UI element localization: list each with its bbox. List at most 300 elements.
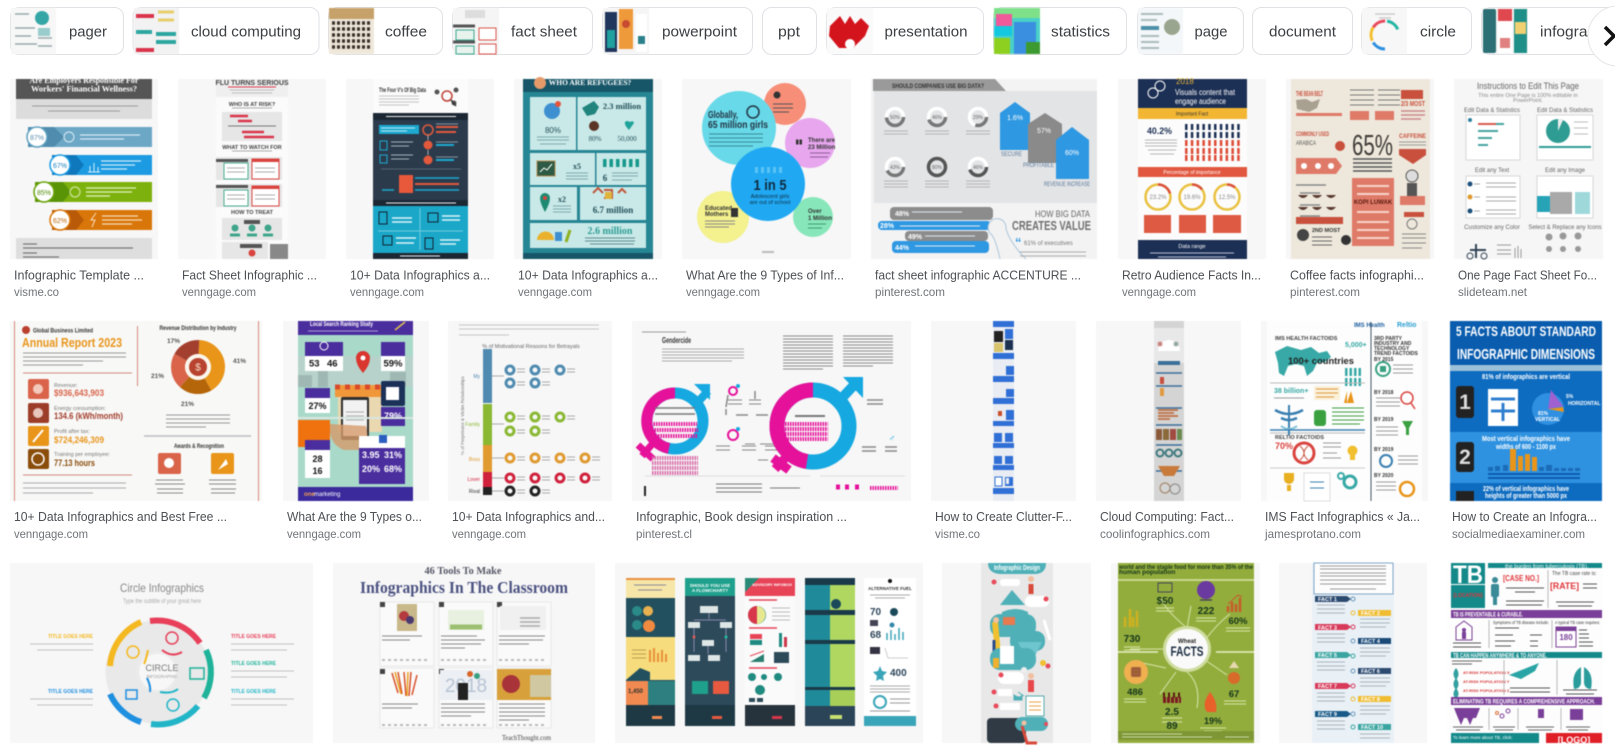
thumbnail: TB fact sheet: TB IS PREVENTABLE & CURABLE. (1453, 612, 1523, 618)
title: What Are the 9 Types of Inf... (686, 268, 844, 282)
thumbnail: 5 facts about standard infographic dimensions: 81% of infographics are vertical (1482, 374, 1570, 381)
thumbnail: local search ranking study: 46 (327, 358, 338, 370)
thumbnail: 1 in 5 venn bubbles (696, 82, 836, 254)
result: IMS Fact Infographics (jamesprotano.com) (1261, 321, 1428, 541)
thumbnail: flu fact sheet: FLU TURNS SERIOUS (215, 80, 289, 87)
chip: presentation (826, 8, 984, 54)
thumbnail: motivational reasons stacked bar: Family (465, 422, 480, 428)
thumbnail: annual report 2023: $936,643,903 (54, 388, 104, 399)
source: coolinfographics.com (1100, 527, 1210, 541)
thumbnail: annual report 2023: Revenue: (54, 383, 78, 389)
thumbnail: 5 facts about standard infographic dimensions (1449, 320, 1603, 502)
thumbnail: fact timeline: FACT 3 (1318, 626, 1337, 632)
thumbnail: circle infographics: TITLE GOES HERE (48, 634, 94, 640)
thumbnail: annual report 2023: 41% (233, 358, 246, 365)
thumbnail: visual audience poster: 23.2% (1149, 195, 1167, 201)
thumbnail: annual report 2023: 21% (151, 373, 164, 380)
thumbnail: visual audience poster: engage audience (1175, 97, 1226, 106)
thumbnail: TB fact sheet: TB CAN HAPPEN ANYWHERE & TO ANYONE. (1453, 654, 1547, 660)
thumbnail: annual report 2023: Profit after tax: (54, 429, 90, 435)
thumbnail: fact timeline: FACT 7 (1318, 684, 1337, 690)
source: visme.co (935, 527, 980, 541)
title: 10+ Data Infographics and Best Free ... (14, 509, 227, 524)
thumbnail: instructions to edit this page: This entire One Page is 100% editable in (1478, 93, 1578, 99)
thumbnail: annual report 2023: $ (195, 362, 201, 374)
source: venngage.com (14, 527, 88, 541)
thumbnail: wheat facts (1117, 562, 1255, 744)
thumbnail: employers financial wellness: Are Employers Responsible For (30, 76, 139, 85)
thumbnail: 5 facts about standard infographic dimensions: heights of greater than 5000 px (1485, 493, 1567, 500)
result: fact sheet infographic ACCENTURE (pinterest.com) (871, 79, 1097, 299)
thumbnail: IMS health factoids (1269, 320, 1418, 502)
chip: presentation: presentation (884, 24, 968, 40)
thumbnail: visual audience poster: 12.5% (1218, 195, 1236, 201)
thumbnail: 5 facts about standard infographic dimensions: widths of 600 - 1100 px (1495, 444, 1556, 451)
thumbnail: annual report 2023: 77.13 hours (54, 458, 95, 469)
result: 46 Tools To Make Infographics In The Classroom (333, 563, 595, 743)
result: Fact Sheet Infographic (venngage.com) (178, 79, 326, 299)
thumbnail: how big data creates value: 48% (895, 211, 910, 218)
title: Retro Audience Facts In... (1122, 268, 1261, 282)
thumbnail: TB fact sheet: TB (1453, 561, 1483, 589)
thumbnail: local search ranking study: 27% (308, 401, 327, 411)
thumbnail: 1 in 5 venn bubbles: 65 million girls (708, 120, 768, 131)
thumbnail: coffee facts: CAFFEINE (1399, 134, 1426, 140)
thumbnail: 1 in 5 venn bubbles: 23 Million (808, 145, 836, 151)
thumbnail: 5 facts about standard infographic dimensions: 22% of vertical infographics have (1483, 486, 1569, 493)
chip: powerpoint: powerpoint (662, 24, 737, 40)
thumbnail: fact timeline: FACT 6 (1361, 669, 1380, 675)
thumbnail: employers financial wellness: 67% (53, 163, 67, 170)
chip: powerpoint (602, 8, 752, 54)
chip: document: document (1269, 24, 1336, 40)
thumbnail: local search ranking study: 20% (362, 464, 380, 474)
thumbnail: wheat facts: FACTS (1170, 643, 1204, 659)
thumbnail: flu fact sheet: WHO IS AT RISK? (229, 102, 276, 108)
thumbnail: infographic design flow: Infographic Design (994, 565, 1040, 572)
thumbnail: wheat facts: 19% (1204, 716, 1222, 726)
thumbnail: 1 in 5 venn bubbles: Mothers (705, 212, 729, 218)
thumbnail: circle infographics: TITLE GOES HERE (48, 689, 94, 695)
thumbnail: set of five infographic posters: 70 (870, 607, 882, 618)
thumbnail: TB fact sheet: AT-RISK POPULATION X (1463, 670, 1510, 675)
thumbnail: local search ranking study: one (304, 492, 315, 498)
chip: circle: circle (1420, 24, 1456, 40)
thumbnail: TB fact sheet: AT-RISK POPULATION Z (1463, 688, 1510, 693)
title: Infographic Template ... (14, 268, 144, 282)
title: How to Create an Infogra... (1452, 509, 1597, 524)
title: Coffee facts infographi... (1290, 268, 1424, 282)
thumbnail: motivational reasons stacked bar: My (473, 374, 480, 380)
thumbnail: TB fact sheet: the burden from tuberculosis (TB). (1505, 564, 1589, 570)
result: How to Create an Infographic (socialmediaexaminer.com) (1450, 321, 1602, 541)
thumbnail: instructions to edit this page: Instructions to Edit This Page (1477, 81, 1579, 92)
thumbnail: local search ranking study: 31% (384, 450, 402, 460)
result: 10+ Data Infographics, refugees (venngage.com) (514, 77, 662, 299)
thumbnail: 5 facts about standard infographic dimensions: 5% (1566, 394, 1574, 400)
chip: statistics: statistics (1051, 24, 1110, 40)
thumbnail: tall narrow blue infographic (992, 320, 1015, 501)
thumbnail: how big data creates value: 46% (973, 165, 984, 171)
title: 10+ Data Infographics and... (452, 509, 605, 524)
thumbnail: local search ranking study: 3.95 (362, 450, 380, 460)
thumbnail: coffee facts: 2/3 MOST (1401, 101, 1426, 108)
thumbnail: gendercide: ♂ (889, 433, 895, 443)
thumbnail: TB fact sheet: [LOCATION] (1453, 593, 1483, 599)
next arrow button (1588, 6, 1615, 66)
result: Infographic, Book design inspiration (pinterest.cl) (632, 321, 911, 541)
thumbnail: coffee facts (1290, 78, 1431, 260)
thumbnail: visual audience poster (1137, 77, 1248, 260)
thumbnail: TB fact sheet: [RATE] (1550, 581, 1579, 592)
source: visme.co (14, 285, 59, 299)
thumbnail: 5 facts about standard infographic dimensions: VERTICAL (1535, 417, 1560, 423)
thumbnail: 1 in 5 venn bubbles: Educated (705, 206, 732, 212)
title: fact sheet infographic ACCENTURE ... (875, 268, 1081, 282)
thumbnail: tools for the classroom (360, 566, 569, 742)
thumbnail: 1 in 5 venn bubbles: Over (808, 209, 822, 215)
thumbnail: IMS health factoids: 100+ countries (1288, 356, 1354, 367)
thumbnail: fact timeline: FACT 9 (1318, 712, 1337, 718)
thumbnail: instructions to edit this page: Edit Data & Statistics (1537, 108, 1593, 114)
thumbnail: fact timeline: FACT 2 (1361, 611, 1380, 617)
thumbnail: IMS health factoids: BY 2019 (1374, 447, 1394, 453)
thumbnail: annual report 2023: Revenue Distribution by Industry (160, 325, 237, 332)
thumbnail: annual report 2023 (13, 320, 260, 502)
thumbnail: who are refugees: x2 (558, 195, 566, 204)
thumbnail: visual audience poster: Visuals content that (1175, 88, 1236, 97)
thumbnail: visual audience poster: 40.2% (1147, 126, 1172, 136)
result: tall infographic design (942, 563, 1091, 743)
result: Retro Audience Facts (venngage.com) (1118, 77, 1266, 299)
thumbnail: 5 facts about standard infographic dimensions: 1 (1459, 391, 1471, 414)
chip: pager: pager (69, 24, 107, 40)
thumbnail: who are refugees (522, 76, 654, 260)
thumbnail: 5 facts about standard infographic dimensions: HORIZONTAL (1568, 401, 1600, 407)
thumbnail: IMS health factoids: 3RD PARTY (1374, 336, 1403, 342)
thumbnail: IMS health factoids: 70% (1275, 441, 1293, 451)
thumbnail: visual audience poster: Data range (1178, 244, 1206, 250)
thumbnail: visual audience poster: Important Fact (1176, 112, 1209, 118)
thumbnail: IMS health factoids: BY 2015 (1374, 357, 1394, 363)
thumbnail: how big data creates value: 1.6% (1007, 115, 1023, 122)
thumbnail: who are refugees: 50,000 (617, 135, 637, 143)
thumbnail: 1 in 5 venn bubbles: Adolescent girls (751, 194, 790, 200)
thumbnail: IMS health factoids: RELTIO FACTOIDS (1275, 435, 1324, 441)
source: venngage.com (518, 285, 592, 299)
thumbnail: motivational reasons stacked bar: Rival (469, 489, 480, 495)
chip: statistics (994, 8, 1126, 54)
thumbnail: local search ranking study: 68% (384, 464, 402, 474)
thumbnail: visual audience poster: 2018 (1176, 77, 1194, 86)
result: One Page Fact Sheet (slideteam.net) (1454, 79, 1603, 299)
thumbnail: IMS health factoids: 38 billion+ (1274, 388, 1308, 395)
thumbnail: local search ranking study: 59% (383, 358, 403, 370)
thumbnail: 1 in 5 venn bubbles: 1 in 5 (754, 177, 786, 194)
thumbnail: motivational reasons stacked bar: Lover (467, 477, 480, 483)
thumbnail: instructions to edit this page: Select & Replace any Icons (1528, 225, 1602, 231)
chip: coffee: coffee (385, 24, 427, 40)
thumbnail: coffee facts: THE BEAN BELT (1296, 91, 1323, 98)
thumbnail: wheat facts: 730 (1124, 634, 1141, 645)
thumbnail: wheat facts: 486 (1127, 687, 1143, 698)
thumbnail: tools for the classroom: 46 Tools To Make (424, 566, 502, 577)
thumbnail: instructions to edit this page: Customize any Color (1464, 225, 1520, 231)
thumbnail: fact timeline: FACT 10 (1361, 725, 1383, 731)
thumbnail: fact timeline: FACT 8 (1361, 697, 1380, 703)
thumbnail: annual report 2023: Awards & Recognition (174, 443, 224, 450)
thumbnail: circle infographics: CIRCLE (145, 663, 179, 673)
source: venngage.com (287, 527, 361, 541)
thumbnail: TB fact sheet: [LOGO] (1558, 735, 1590, 745)
thumbnail: wheat facts: human population (1119, 569, 1175, 576)
thumbnail: TB fact sheet: The TB case rate is: (1552, 571, 1597, 577)
thumbnail: infographic design flow (980, 562, 1054, 746)
thumbnail: instructions to edit this page (1454, 80, 1602, 260)
thumbnail: IMS health factoids: BY 2019 (1374, 417, 1394, 423)
thumbnail: fact timeline (1311, 562, 1395, 743)
result: 10+ Data Infographics and (venngage.com) (448, 321, 612, 541)
thumbnail: IMS health factoids: INDUSTRY AND (1374, 341, 1412, 347)
thumbnail: who are refugees: 80% (545, 126, 561, 135)
thumbnail: circle infographics: Type the subtitle of your great here (123, 598, 201, 605)
thumbnail: annual report 2023: Energy consumption: (54, 406, 106, 412)
thumbnail: set of five infographic posters: SHOULD YOU USE (690, 583, 730, 588)
thumbnail: visual audience poster: 19.6% (1183, 195, 1201, 201)
thumbnail: IMS health factoids: TECHNOLOGY (1374, 346, 1410, 352)
result: What Are the 9 Types (venngage.com) (283, 321, 429, 541)
result: five posters (615, 563, 923, 743)
thumbnail: who are refugees: 2.6 million (587, 226, 633, 237)
title: What Are the 9 Types o... (287, 509, 422, 524)
thumbnail: flu fact sheet (214, 79, 290, 260)
thumbnail: how big data creates value (872, 78, 1098, 260)
title: Fact Sheet Infographic ... (182, 268, 317, 282)
thumbnail: annual report 2023: Annual Report 2023 (22, 335, 122, 350)
thumbnail: motivational reasons stacked bar: % of Perpetrator & Victim Relationships (460, 376, 465, 455)
thumbnail: how big data creates value: 50% (890, 115, 901, 121)
result: wheat facts (1111, 563, 1260, 743)
thumbnail: wheat facts: 60% (1228, 616, 1248, 627)
thumbnail: local search ranking study: Local Search Ranking Study (310, 321, 373, 328)
thumbnail: how big data creates value: 44% (895, 245, 910, 252)
thumbnail: local search ranking study (297, 320, 414, 502)
source: slideteam.net (1458, 285, 1528, 299)
thumbnail: local search ranking study: 53 (309, 358, 320, 370)
thumbnail: how big data creates value: 43% (890, 165, 901, 171)
thumbnail: four Vs of big data (372, 86, 469, 260)
thumbnail: coffee facts: ARABICA (1296, 141, 1316, 147)
title: Cloud Computing: Fact... (1100, 509, 1234, 524)
thumbnail: who are refugees: 2.3 million (603, 101, 641, 111)
source: pinterest.com (875, 285, 945, 299)
thumbnail: how big data creates value: “ (1015, 235, 1022, 250)
result: Coffee facts infographic (pinterest.com) (1286, 79, 1434, 299)
chip row: related searches (10, 8, 1615, 54)
thumbnail: circle infographics: TITLE GOES HERE (231, 689, 277, 695)
thumbnail: set of five infographic posters (625, 577, 917, 727)
thumbnail: how big data creates value: SECURE (1001, 152, 1022, 158)
thumbnail: local search ranking study: 16 (312, 466, 323, 476)
thumbnail: TB fact sheet: To learn more about TB, click: (1453, 735, 1512, 740)
chip: fact sheet: fact sheet (511, 24, 577, 40)
thumbnail: TB fact sheet: AT-RISK POPULATION Y (1463, 679, 1510, 684)
thumbnail: tools for the classroom: Infographics In The Classroom (360, 578, 568, 597)
thumbnail: motivational reasons stacked bar (458, 324, 601, 498)
thumbnail: how big data creates value: 28% (880, 223, 895, 230)
thumbnail: who are refugees: 6 (603, 173, 608, 183)
chip: cloud computing: cloud computing (191, 24, 301, 40)
thumbnail: circle infographics: TITLE GOES HERE (231, 634, 277, 640)
result: What Are the 9 Types of Infographics (venngage.com) (682, 79, 851, 299)
thumbnail: coffee facts: COMMONLY USED (1296, 132, 1329, 138)
thumbnail: flu fact sheet: WHAT TO WATCH FOR (222, 145, 282, 151)
thumbnail: set of five infographic posters: 400 (890, 668, 907, 679)
thumbnail: gendercide: Gendercide (662, 336, 691, 345)
thumbnail: 5 facts about standard infographic dimensions: 2 (1459, 446, 1471, 469)
thumbnail: circle infographics: Circle Infographics (120, 581, 204, 595)
thumbnail: employers financial wellness: 62% (53, 218, 67, 225)
thumbnail: how big data creates value: 61% of executives (1024, 241, 1073, 247)
thumbnail: instructions to edit this page: Edit any Image (1545, 168, 1586, 174)
source: venngage.com (350, 285, 424, 299)
thumbnail: tools for the classroom: 2018 (445, 676, 487, 697)
source: socialmediaexaminer.com (1452, 527, 1585, 541)
thumbnail: employers financial wellness: 87% (30, 135, 44, 142)
thumbnail: who are refugees: WHO ARE REFUGEES? (549, 78, 632, 87)
thumbnail: IMS health factoids: BY 2018 (1374, 390, 1394, 396)
thumbnail: how big data creates value: 29% (973, 115, 984, 121)
chip: fact sheet (452, 8, 592, 54)
thumbnail: gendercide (634, 330, 906, 497)
thumbnail: annual report 2023: 21% (181, 401, 194, 408)
thumbnail: how big data creates value: 57% (1037, 128, 1051, 135)
thumbnail: motivational reasons stacked bar: Boss (469, 457, 480, 463)
thumbnail: set of five infographic posters: A FLOWCHART? (692, 588, 728, 593)
thumbnail: circle infographics: INFOGRAPHIC (146, 674, 178, 679)
source: venngage.com (686, 285, 760, 299)
thumbnail: annual report 2023: Training per employee: (54, 452, 111, 458)
thumbnail: 5 facts about standard infographic dimensions: Most vertical infographics have (1482, 436, 1570, 443)
title: How to Create Clutter-F... (935, 509, 1072, 524)
thumbnail: fact timeline: FACT 1 (1318, 597, 1337, 603)
chip: page: page (1194, 24, 1228, 40)
thumbnail: flu fact sheet: HOW TO TREAT (231, 210, 274, 216)
result: Circle Infographics (10, 563, 313, 743)
title: 10+ Data Infographics a... (518, 268, 658, 282)
thumbnail: IMS health factoids: Reltio (1397, 322, 1416, 329)
thumbnail: visual audience poster: Percentage of importance (1163, 170, 1221, 176)
chip: circle (1362, 8, 1472, 54)
thumbnail: local search ranking study: 79% (384, 411, 402, 421)
thumbnail: who are refugees: 6.7 million (593, 205, 633, 215)
thumbnail: how big data creates value: 46% (932, 115, 943, 121)
chip: document (1252, 8, 1352, 54)
thumbnail: TB fact sheet: 180 (1559, 633, 1573, 642)
thumbnail: tools for the classroom: TeachThought.com (502, 734, 551, 742)
source: venngage.com (452, 527, 526, 541)
thumbnail: wheat facts: 222 (1198, 606, 1215, 617)
thumbnail: how big data creates value: SHOULD COMPANIES USE BIG DATA? (892, 83, 984, 90)
thumbnail: coffee facts: KOPI LUWAK (1354, 200, 1393, 206)
thumbnail: set of five infographic posters: ALTERNATIVE FUEL (868, 586, 912, 591)
thumbnail: IMS health factoids: IMS HEALTH FACTOIDS (1275, 336, 1338, 342)
title: IMS Fact Infographics « Ja... (1265, 509, 1420, 524)
thumbnail: who are refugees: 80% (589, 135, 602, 143)
chip: ppt: ppt (778, 24, 800, 40)
result: Cloud Computing Fact (coolinfographics.com) (1096, 321, 1241, 541)
title: 10+ Data Infographics a... (350, 268, 490, 282)
thumbnail: employers financial wellness: 85% (37, 190, 51, 197)
thumbnail: wheat facts: 89 (1166, 721, 1178, 732)
source: pinterest.com (1290, 285, 1360, 299)
thumbnail: IMS health factoids: TREND FACTOIDS (1374, 351, 1418, 357)
thumbnail: TB fact sheet: Symptoms of TB disease include: (1493, 620, 1549, 625)
title: Infographic, Book design inspiration ... (636, 509, 847, 524)
chip: coffee (328, 8, 442, 54)
thumbnail: coffee facts: 2ND MOST (1312, 228, 1341, 234)
thumbnail: annual report 2023: 134.6 (kWh/month) (54, 411, 123, 422)
result: TB fact sheet (1448, 561, 1603, 745)
chip: page (1138, 8, 1244, 54)
chip: pager (10, 8, 124, 54)
thumbnail: 1 in 5 venn bubbles: 1 Million (808, 216, 832, 222)
chip: cloud computing (133, 8, 319, 54)
thumbnail: IMS health factoids: IMS Health (1354, 323, 1385, 329)
thumbnail: how big data creates value: 49% (908, 234, 923, 241)
result: 10+ Data Infographics, big data (venngage.com) (346, 79, 494, 299)
thumbnail: annual report 2023: $724,246,309 (54, 435, 104, 446)
thumbnail: who are refugees: x5 (573, 162, 581, 171)
thumbnail: coffee facts: 65% (1352, 130, 1393, 162)
thumbnail: 1 in 5 venn bubbles: Globally, (708, 110, 738, 121)
thumbnail: instructions to edit this page: Edit Data & Statistics (1464, 108, 1520, 114)
thumbnail: TB fact sheet (1450, 561, 1603, 745)
thumbnail: wheat facts: 67 (1229, 689, 1239, 700)
result: How to Create Clutter-Free (visme.co) (931, 321, 1076, 541)
thumbnail: set of five infographic posters: 68 (870, 630, 882, 641)
thumbnail: TB fact sheet: [CASE NO.] (1503, 574, 1539, 583)
thumbnail: how big data creates value: 80% (932, 165, 943, 171)
result: Infographic Template (visme.co) (10, 76, 158, 299)
thumbnail: set of five infographic posters: ADVISORY INFOBOX (752, 582, 792, 587)
result: fact timeline (1279, 563, 1427, 743)
thumbnail: four Vs of big data: The Four V's Of Big Data (379, 87, 426, 94)
source: pinterest.cl (636, 527, 692, 541)
result: 10+ Data Infographics and Best Free (venngage.com) (10, 321, 262, 541)
thumbnail: annual report 2023: 17% (167, 338, 180, 345)
thumbnail: fact timeline: FACT 4 (1361, 639, 1381, 645)
thumbnail: instructions to edit this page: Edit any Text (1475, 168, 1509, 174)
thumbnail: how big data creates value: 60% (1065, 150, 1079, 157)
chip: ppt (762, 8, 816, 54)
thumbnail: IMS health factoids: BY 2020 (1374, 473, 1394, 479)
thumbnail: wheat facts: $50 (1157, 596, 1174, 607)
thumbnail: wheat facts: Wheat (1178, 639, 1196, 645)
thumbnail: motivational reasons stacked bar: % of Motivational Reasons for Betrayals (482, 344, 580, 350)
thumbnail: instructions to edit this page: PowerPoint. (1513, 98, 1543, 104)
thumbnail: wheat facts: 2.5 (1165, 707, 1179, 718)
thumbnail: employers financial wellness (15, 76, 153, 260)
thumbnail: IMS health factoids: 5,000+ (1345, 342, 1367, 349)
chip: infographic (1482, 8, 1615, 54)
thumbnail: circle infographics (29, 581, 295, 728)
thumbnail: how big data creates value: PROFITABLE (1023, 163, 1054, 169)
thumbnail: 1 in 5 venn bubbles: There are (808, 138, 836, 144)
thumbnail: 1 in 5 venn bubbles: are out of school (750, 200, 790, 206)
thumbnail: set of five infographic posters: 1,450 (628, 689, 644, 695)
chip: infographic: infographic (1540, 24, 1615, 40)
